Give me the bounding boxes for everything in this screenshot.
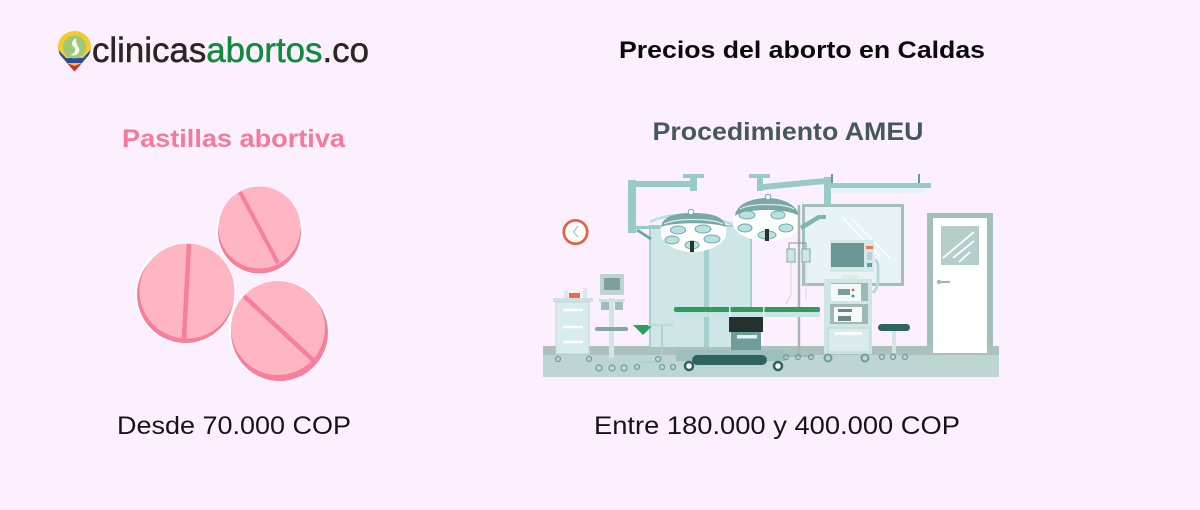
- screen partition: [649, 226, 752, 347]
- pill: left: [135, 243, 236, 344]
- ceiling arm right: [749, 174, 931, 218]
- surgical lamp left: [650, 209, 736, 252]
- pill: top right: [216, 186, 303, 274]
- heading: procedimiento AMEU: Procedimiento AMEU: [652, 118, 924, 146]
- pill: bottom right: [228, 280, 330, 382]
- surgical lamp right: [733, 194, 801, 241]
- casters: [556, 354, 908, 371]
- instrument tower: [824, 279, 872, 354]
- logo: clinicasabortos.co: [58, 31, 369, 72]
- operating table: [674, 306, 820, 370]
- drawer cabinet: [553, 288, 593, 354]
- instrument tray: [633, 325, 673, 362]
- floor: [543, 346, 999, 377]
- illustration: operating room: [543, 174, 999, 377]
- wall window: [804, 206, 902, 284]
- lamp bracket: [800, 215, 826, 230]
- wall clock: [564, 220, 587, 244]
- door: [927, 213, 993, 353]
- icon: map pin: [58, 31, 91, 72]
- wordmark: clinicasabortos.co: [92, 31, 369, 70]
- ceiling arm left: [628, 174, 704, 240]
- title: Precios del aborto en Caldas: [619, 37, 985, 64]
- monitor cart: [595, 274, 628, 358]
- price: pastillas: Desde 70.000 COP: [117, 412, 351, 440]
- heading: pastillas abortiva: Pastillas abortiva: [122, 125, 346, 153]
- tower monitor: [830, 240, 878, 293]
- price: AMEU: Entre 180.000 y 400.000 COP: [594, 412, 960, 440]
- icon: pink pills: [135, 186, 330, 382]
- IV stand: [786, 205, 812, 356]
- stool: [878, 324, 910, 353]
